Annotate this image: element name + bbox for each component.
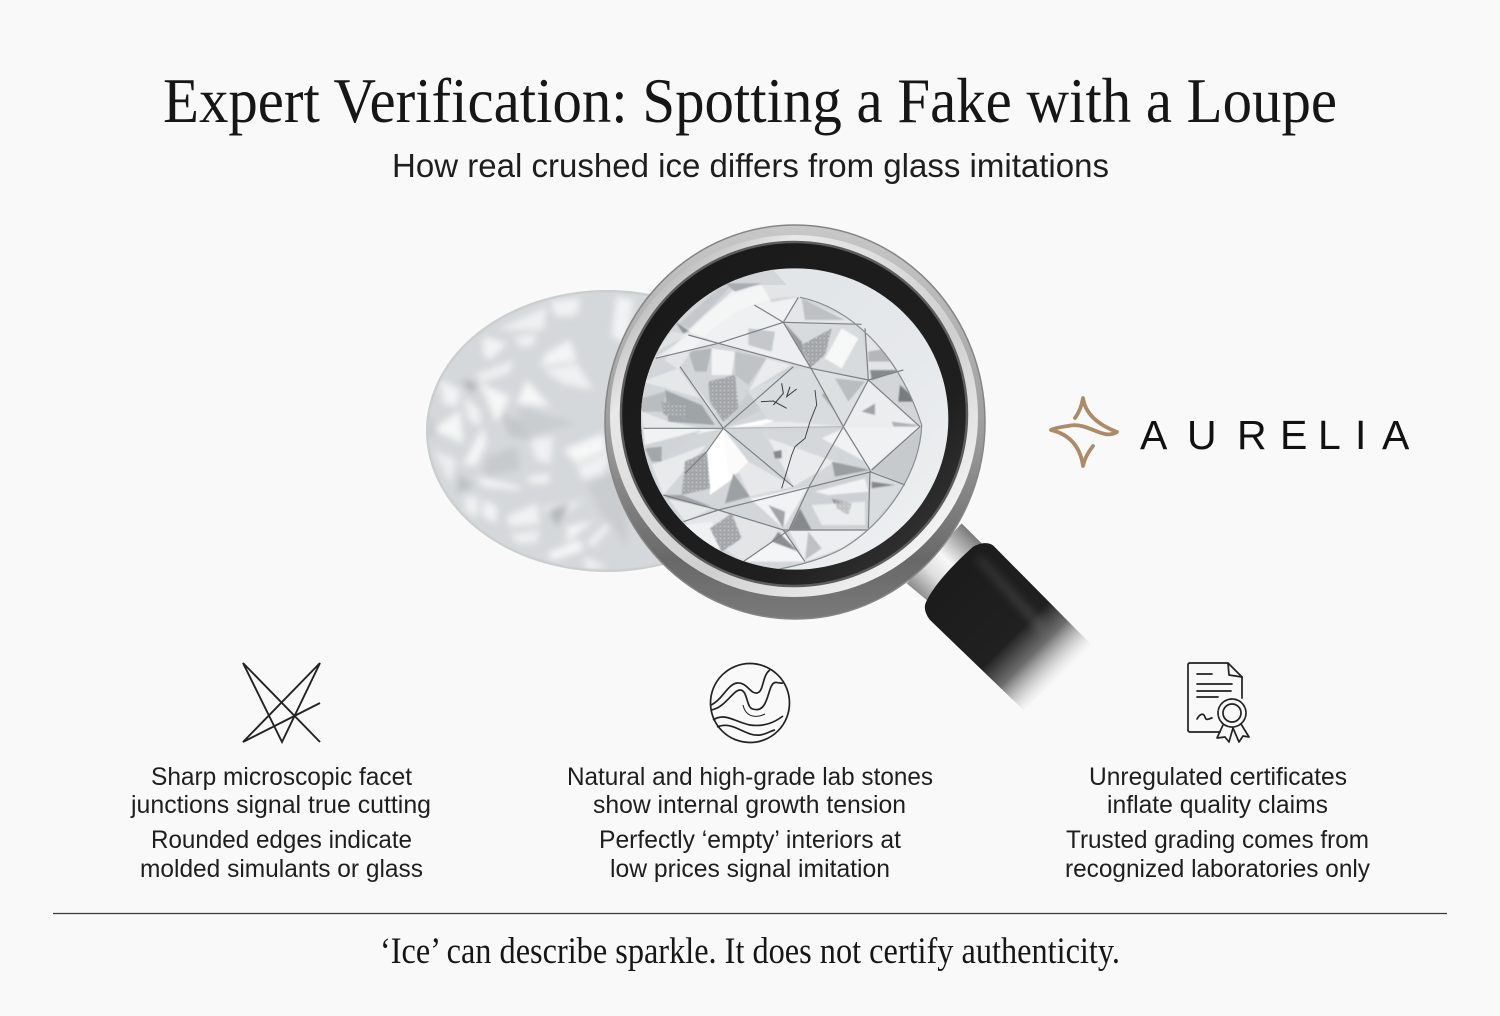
loupe glass [641,268,948,570]
glass glare [665,285,798,368]
sparkle inclusions [662,328,852,552]
loupe black bezel [621,242,967,586]
loupe grip [925,543,1093,710]
icon: growth lines in circle [710,664,790,742]
magnified glass and stone [635,265,955,585]
loupe silver ring [610,235,978,597]
text: facet junctions: junctions signal true cutting [130,791,431,819]
text: facet junctions: molded simulants or glass [140,855,423,883]
loupe outer rim [605,225,985,619]
icon: crossed facet lines [243,663,320,742]
facet lines [643,297,922,571]
text: internal growth: Natural and high-grade lab stones [567,763,933,791]
text: certificates: Trusted grading comes from [1066,826,1369,854]
grip highlight [977,557,1047,633]
brand logo [1051,398,1410,466]
column 3: certificates [1065,663,1370,883]
column 2: internal growth [567,664,933,883]
loupe handle [907,523,1093,710]
logo mark [1051,398,1117,466]
subtitle: How real crushed ice differs from glass imitations [392,147,1109,184]
magnifying loupe [605,225,1093,710]
crack inclusions [761,383,817,488]
text: internal growth: Perfectly ‘empty’ interiors at [599,826,901,854]
text: internal growth: low prices signal imitation [610,855,890,883]
text: facet junctions: Sharp microscopic facet [151,763,412,791]
text: internal growth [567,763,933,883]
title: Expert Verification: Spotting a Fake with a Loupe [163,65,1337,136]
text: certificates: Unregulated certificates [1089,763,1347,791]
text: certificates: inflate quality claims [1107,791,1328,819]
blurred diamond behind the loupe [426,290,663,572]
text: certificates: recognized laboratories only [1065,855,1370,883]
footer statement: ‘Ice’ can describe sparkle. It does not certify authenticity. [380,931,1120,972]
text: certificates [1065,763,1370,883]
column 1: facet junctions [130,663,431,883]
icon: certificate with seal [1188,663,1249,742]
text: facet junctions [130,763,431,883]
logo wordmark: AURELIA [1140,412,1410,458]
text: facet junctions: Rounded edges indicate [151,826,412,854]
text: internal growth: show internal growth tension [593,791,906,819]
loupe ferrule [907,523,982,600]
